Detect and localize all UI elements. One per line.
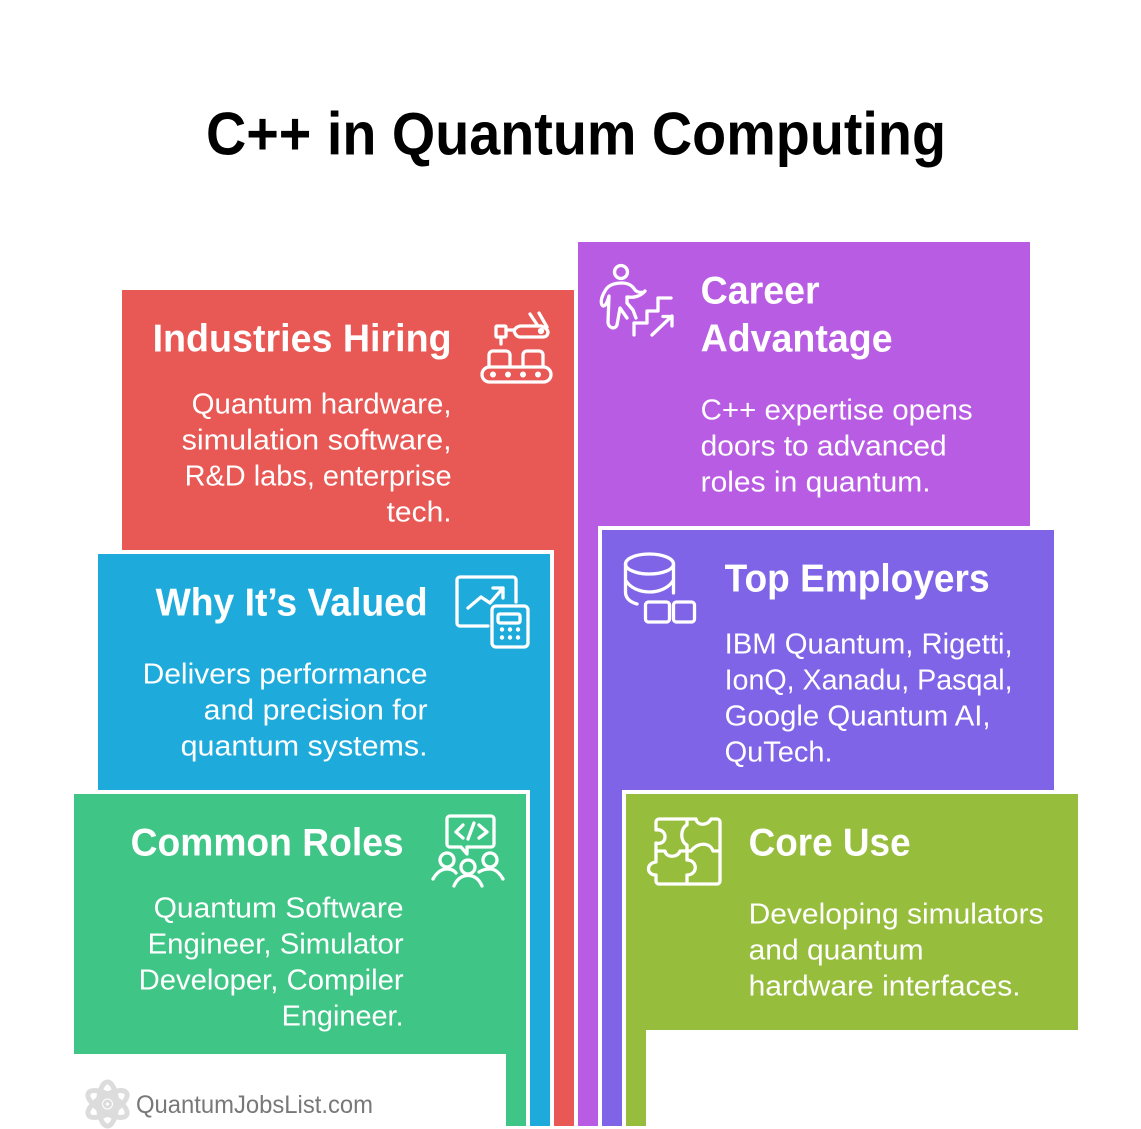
title: C++ in Quantum Computing xyxy=(206,100,946,168)
text: core use: and quantum xyxy=(749,934,924,966)
text: career advantage xyxy=(701,394,973,498)
heading: career advantage xyxy=(701,270,893,360)
text: common roles: Engineer. xyxy=(282,1000,404,1032)
text: industries hiring: Quantum hardware, xyxy=(192,388,452,420)
text: career advantage: roles in quantum. xyxy=(701,466,931,498)
text: why it's valued xyxy=(143,658,428,762)
text: industries hiring xyxy=(182,388,452,528)
icon: atom logo xyxy=(84,1082,131,1126)
text: top employers: IBM Quantum, Rigetti, xyxy=(725,628,1013,660)
text: common roles: Quantum Software xyxy=(154,892,404,924)
heading: why it's valued: Why It’s Valued xyxy=(156,582,428,624)
heading: career advantage: Career xyxy=(701,270,820,312)
text: top employers: QuTech. xyxy=(725,736,833,768)
text: common roles: Engineer, Simulator xyxy=(148,928,404,960)
panel: why it's valued xyxy=(98,554,550,1126)
footer logo xyxy=(84,1082,373,1126)
text: career advantage: doors to advanced xyxy=(701,430,947,462)
heading: top employers: Top Employers xyxy=(725,558,990,600)
text: industries hiring: R&D labs, enterprise xyxy=(185,460,452,492)
text: career advantage: C++ expertise opens xyxy=(701,394,973,426)
text: industries hiring: tech. xyxy=(387,496,452,528)
panel: core use xyxy=(626,794,1078,1126)
text: top employers: Google Quantum AI, xyxy=(725,700,991,732)
panel: industries hiring xyxy=(122,290,574,1126)
text: why it's valued: Delivers performance xyxy=(143,658,428,690)
heading: common roles: Common Roles xyxy=(131,822,404,864)
panel: top employers xyxy=(602,530,1054,1126)
icon: team with code bubble xyxy=(433,816,503,886)
icon: database and links xyxy=(626,554,694,622)
panel: career advantage xyxy=(578,242,1030,1126)
heading: core use: Core Use xyxy=(749,822,911,864)
text: core use: hardware interfaces. xyxy=(749,970,1021,1002)
heading: industries hiring: Industries Hiring xyxy=(153,318,452,360)
text: website: QuantumJobsList.com xyxy=(136,1091,373,1119)
heading: career advantage: Advantage xyxy=(701,318,893,360)
text: common roles xyxy=(139,892,404,1032)
icon: person climbing stairs xyxy=(601,266,672,335)
text: why it's valued: and precision for xyxy=(204,694,428,726)
text: core use: Developing simulators xyxy=(749,898,1044,930)
text: common roles: Developer, Compiler xyxy=(139,964,404,996)
text: why it's valued: quantum systems. xyxy=(181,730,428,762)
text: top employers xyxy=(725,628,1013,768)
icon: robot arm and conveyor xyxy=(482,313,551,382)
text: top employers: IonQ, Xanadu, Pasqal, xyxy=(725,664,1013,696)
panel: common roles xyxy=(74,794,526,1126)
icon: chart and calculator xyxy=(457,577,528,647)
text: core use xyxy=(749,898,1044,1002)
text: industries hiring: simulation software, xyxy=(182,424,452,456)
icon: puzzle pieces xyxy=(648,819,720,884)
